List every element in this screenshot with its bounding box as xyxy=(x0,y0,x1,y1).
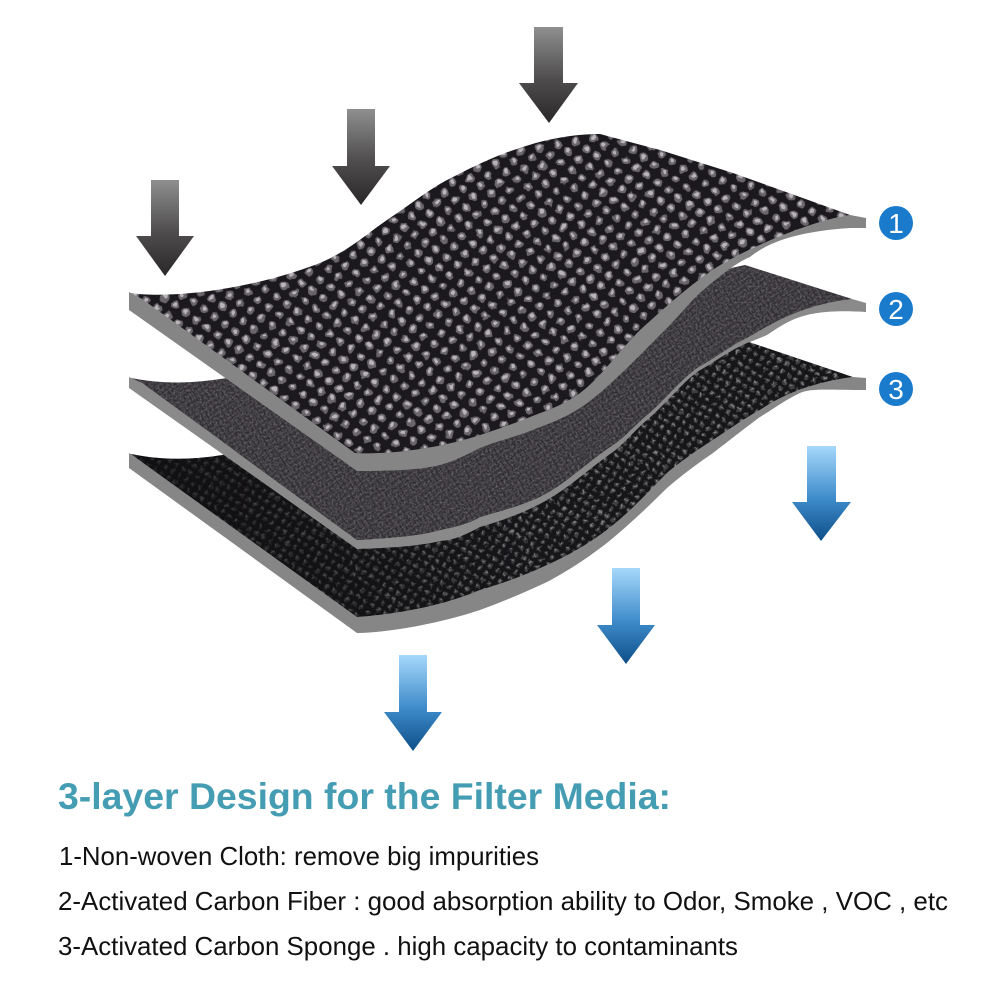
arrow: air out, right xyxy=(792,446,851,541)
layer 1: non-woven cloth xyxy=(120,125,870,471)
arrow: air in, top xyxy=(519,27,578,123)
badge: layer 1 xyxy=(879,206,913,240)
arrow: air in, middle xyxy=(332,109,390,205)
arrow: air in, left xyxy=(136,180,194,276)
title: 3-layer Design for the Filter Media: xyxy=(58,776,671,817)
text: layer 3 description: 3-Activated Carbon Sponge . high capacity to contaminants xyxy=(58,931,738,961)
layer 2: activated carbon fiber xyxy=(120,260,870,550)
text: layer 1 description: 1-Non-woven Cloth: remove big impurities xyxy=(59,841,539,871)
badge: layer 3 xyxy=(879,372,913,406)
badge: layer 3: 3 xyxy=(888,374,904,405)
layer 3: activated carbon sponge xyxy=(120,330,870,633)
diagram: three filter layers xyxy=(120,125,870,633)
badge: layer 2: 2 xyxy=(888,294,904,325)
arrow: air out, middle xyxy=(597,568,655,664)
arrow: air out, left xyxy=(384,655,442,751)
text: layer 2 description: 2-Activated Carbon Fiber : good absorption ability to Odor, Smoke , VOC , etc xyxy=(58,886,948,916)
badge: layer 2 xyxy=(879,292,913,326)
badge: layer 1: 1 xyxy=(888,208,904,239)
